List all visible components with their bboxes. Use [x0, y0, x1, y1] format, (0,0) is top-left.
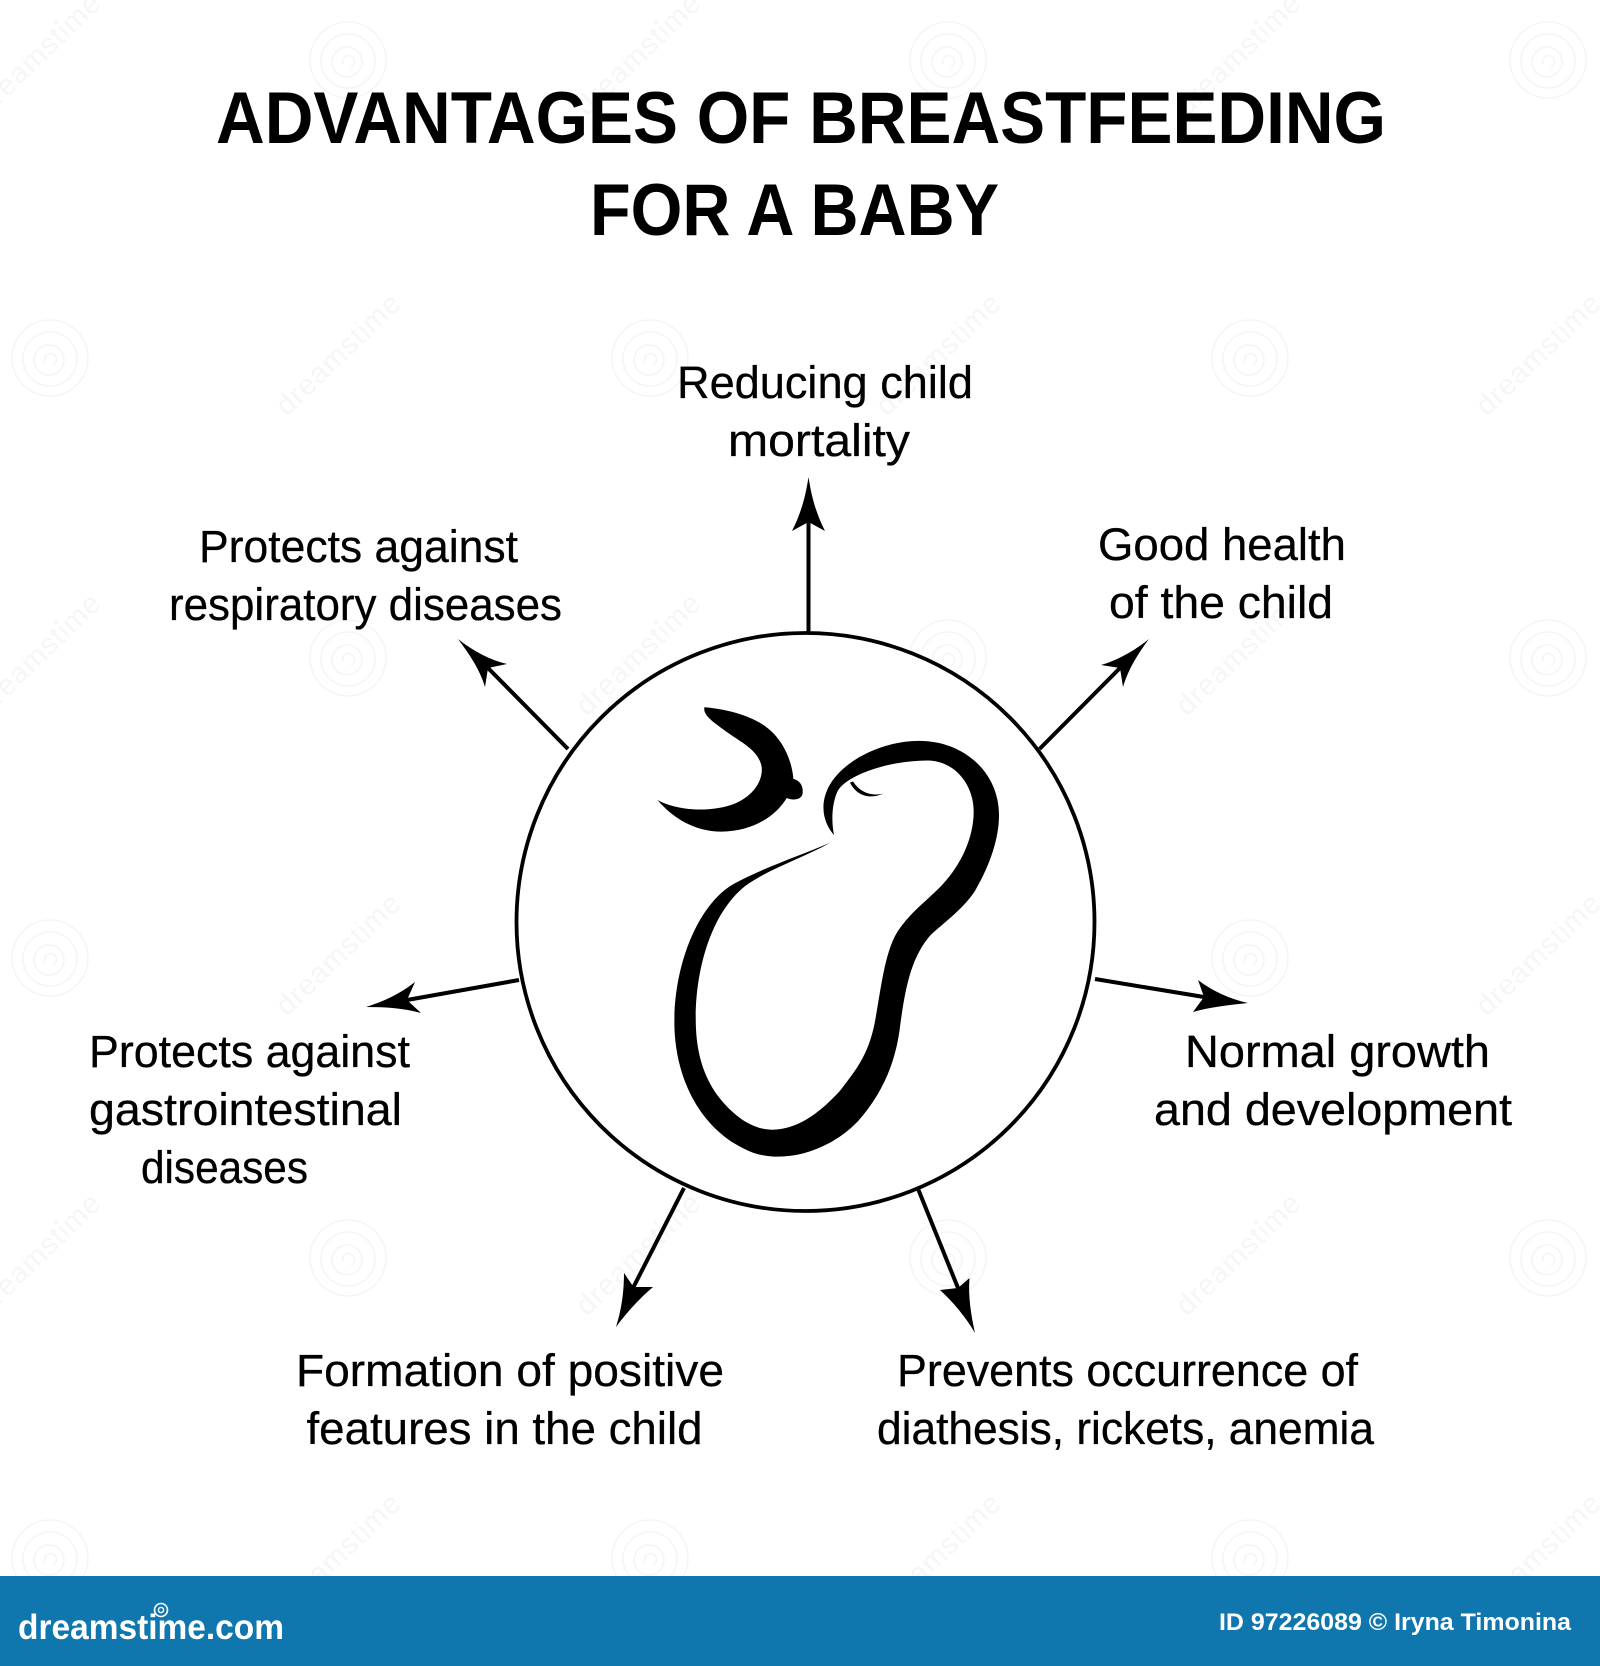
infographic: dreamstime	[270, 887, 408, 1022]
label: prevents occurrence of diathesis, rickets, anemia	[877, 1345, 1375, 1454]
arrow: lower left	[616, 1188, 684, 1327]
label: protects against respiratory diseases	[169, 521, 562, 630]
label: reducing child mortality	[677, 357, 973, 466]
title: ADVANTAGES OF BREASTFEEDING	[216, 78, 1386, 159]
label: protects against respiratory diseases: respiratory diseases	[169, 579, 562, 630]
label: reducing child mortality: Reducing child	[677, 357, 973, 408]
label: prevents occurrence of diathesis, rickets, anemia: diathesis, rickets, anemia	[877, 1403, 1375, 1454]
infographic: dreamstime	[870, 287, 1008, 422]
infographic: dreamstime	[870, 1487, 1008, 1622]
infographic: dreamstime	[1170, 1187, 1308, 1322]
infographic: dreamstime	[270, 287, 408, 422]
label: prevents occurrence of diathesis, rickets, anemia: Prevents occurrence of	[897, 1345, 1358, 1396]
infographic: dreamstime	[270, 1487, 408, 1622]
label: formation of positive features	[296, 1345, 724, 1454]
central circle	[516, 633, 1094, 1211]
label: normal growth and development: Normal growth	[1185, 1026, 1490, 1077]
label: good health of the child: of the child	[1109, 577, 1333, 628]
infographic: dreamstime	[570, 587, 708, 722]
label: protects against gastrointestinal diseases: gastrointestinal	[89, 1084, 402, 1135]
label: normal growth and development	[1154, 1026, 1513, 1135]
icon: baby outline	[674, 741, 999, 1157]
footer credit: ID 97226089 © Iryna Timonina	[1219, 1609, 1572, 1636]
arrow: lower right	[918, 1190, 975, 1333]
title: FOR A BABY	[590, 170, 999, 251]
label: protects against gastrointestinal diseases: Protects against	[89, 1026, 410, 1077]
icon: breast crescent	[657, 707, 803, 832]
label: good health of the child	[1098, 519, 1346, 628]
arrow: top	[792, 477, 825, 632]
icon: baby eye	[850, 781, 884, 796]
label: formation of positive features: features in the child	[306, 1403, 702, 1454]
label: formation of positive features: Formation of positive	[296, 1345, 724, 1396]
arrow: left	[366, 980, 519, 1013]
icon: mother and baby silhouette	[657, 707, 999, 1157]
label: reducing child mortality: mortality	[728, 415, 911, 466]
label: protects against respiratory diseases: Protects against	[199, 521, 518, 572]
arrow: right	[1095, 979, 1248, 1012]
footer bar	[0, 1576, 1600, 1666]
label: protects against gastrointestinal diseases	[89, 1026, 410, 1193]
infographic: dreamstime	[1170, 587, 1308, 722]
footer logo: dreamstime.com	[18, 1608, 284, 1647]
label: good health of the child: Good health	[1098, 519, 1346, 570]
title	[216, 78, 1386, 251]
arrow: upper left	[458, 639, 568, 749]
label: normal growth and development: and development	[1154, 1084, 1513, 1135]
infographic: dreamstime	[570, 1187, 708, 1322]
label: protects against gastrointestinal diseases: diseases	[141, 1142, 308, 1193]
arrow: upper right	[1040, 639, 1149, 749]
